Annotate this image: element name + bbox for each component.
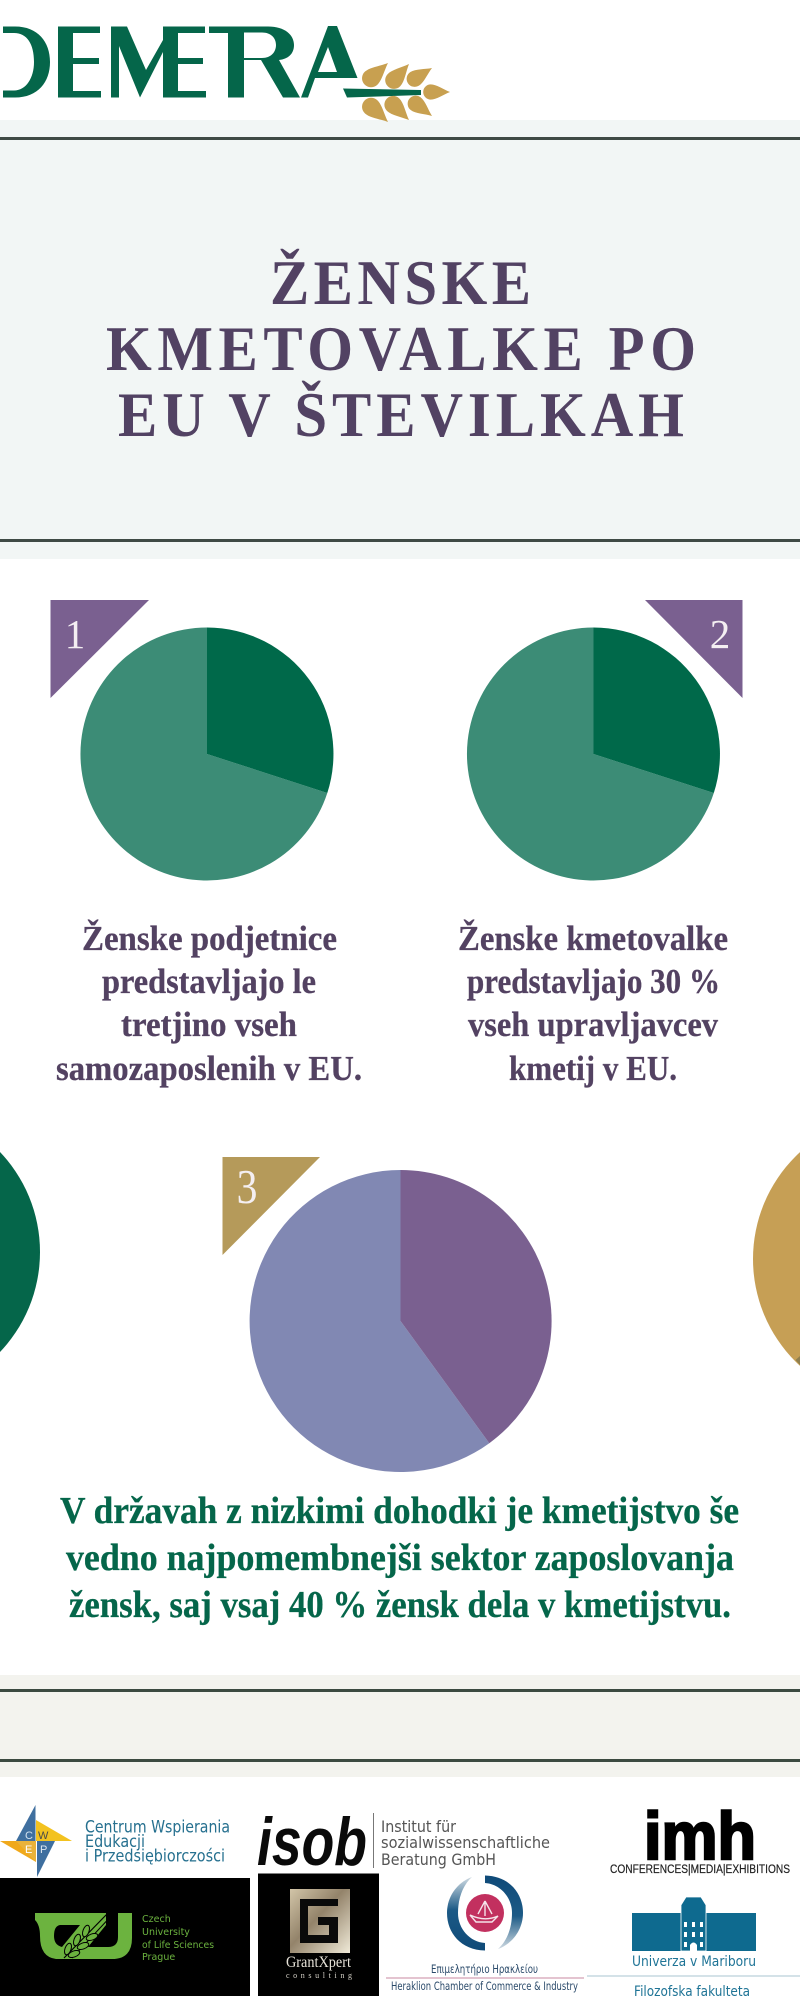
icon: wheat grains xyxy=(358,56,450,129)
logo: isob: Beratung GmbH xyxy=(381,1850,496,1869)
title xyxy=(106,248,696,451)
title: EU V ŠTEVILKAH xyxy=(118,380,684,451)
logo: Demetra xyxy=(3,26,450,129)
logo: isob xyxy=(257,1804,550,1880)
logo: CWEP: P xyxy=(40,1844,47,1856)
panel: title band xyxy=(0,120,800,559)
logo: CZU: University xyxy=(142,1927,190,1938)
decorative circle: gold right xyxy=(753,1114,800,1404)
logo: CWEP: i Przedsiębiorczości xyxy=(85,1846,225,1866)
badge: number 2: 2 xyxy=(710,611,730,657)
logo: Univerza v Mariboru xyxy=(587,1897,800,2000)
logo: CWEP xyxy=(0,1805,230,1877)
logo: Heraklion Chamber: Heraklion Chamber of Commerce & Industry xyxy=(391,1979,578,1993)
logo: GrantXpert xyxy=(258,1874,379,1996)
logo: isob: Institut für xyxy=(381,1817,456,1836)
text: statistic 3: V državah z nizkimi dohodki je kmetijstvo še xyxy=(60,1490,739,1532)
logo: CZU xyxy=(0,1878,250,1996)
badge: number 2 xyxy=(645,600,742,698)
logo: isob: isob xyxy=(257,1804,367,1880)
logo: Univerza v Mariboru: Univerza v Mariboru xyxy=(632,1954,756,1970)
title: KMETOVALKE PO xyxy=(106,314,696,385)
logo: CZU: Czech xyxy=(142,1914,171,1925)
badge: number 3: 3 xyxy=(237,1159,257,1214)
logo: imh: imh xyxy=(644,1799,756,1874)
text: statistic 2: kmetij v EU. xyxy=(509,1049,677,1088)
text: statistic 1: samozaposlenih v EU. xyxy=(56,1049,362,1088)
logo: GrantXpert: consulting xyxy=(286,1971,352,1980)
text: statistic 1: Ženske podjetnice xyxy=(82,918,337,958)
logo: CWEP: W xyxy=(38,1830,49,1842)
title: ŽENSKE xyxy=(270,248,531,319)
text: statistic 3: vedno najpomembnejši sektor zaposlovanja xyxy=(66,1537,734,1579)
text: statistic 2 xyxy=(458,918,728,1088)
logo: CWEP: Centrum Wspierania xyxy=(85,1818,230,1836)
text: statistic 2: predstavljajo 30 % xyxy=(467,962,720,1001)
badge: number 3 xyxy=(222,1157,320,1255)
text: statistic 2: vseh upravljavcev xyxy=(468,1005,718,1044)
logo: Heraklion Chamber: Επιμελητήριο Ηρακλείου xyxy=(431,1962,538,1976)
pie chart: 30 percent xyxy=(467,628,720,880)
badge: number 1 xyxy=(50,600,149,698)
logo: Univerza v Mariboru: Filozofska fakulteta xyxy=(634,1984,750,2000)
text: statistic 1: predstavljajo le xyxy=(102,962,316,1001)
logo: GrantXpert: GrantXpert xyxy=(286,1954,352,1971)
text: statistic 2: Ženske kmetovalke xyxy=(458,918,728,958)
panel: statistic 1 xyxy=(50,600,362,1088)
logo: CWEP: E xyxy=(25,1844,32,1856)
logo: CWEP: Edukacji xyxy=(85,1832,145,1851)
logo: CZU: of Life Sciences xyxy=(142,1940,214,1951)
logo: CWEP: C xyxy=(25,1830,33,1842)
panel: footer band xyxy=(0,1675,800,1777)
logo: imh xyxy=(610,1799,790,1876)
text: statistic 1 xyxy=(56,918,362,1088)
pie chart: 40 percent xyxy=(250,1170,552,1472)
decorative circle: green left xyxy=(0,1107,40,1397)
text: statistic 1: tretjino vseh xyxy=(121,1005,297,1044)
panel: statistic 3 xyxy=(60,1157,739,1626)
text: statistic 3: žensk, saj vsaj 40 % žensk dela v kmetijstvu. xyxy=(69,1584,731,1626)
text: statistic 3 xyxy=(60,1490,739,1626)
panel: statistic 2 xyxy=(458,600,742,1088)
pie chart: one third xyxy=(80,628,333,880)
logo: Heraklion Chamber xyxy=(386,1876,584,1993)
badge: number 1: 1 xyxy=(65,611,85,657)
logo: isob: sozialwissenschaftliche xyxy=(381,1833,550,1852)
logo: CZU: Prague xyxy=(142,1952,175,1963)
